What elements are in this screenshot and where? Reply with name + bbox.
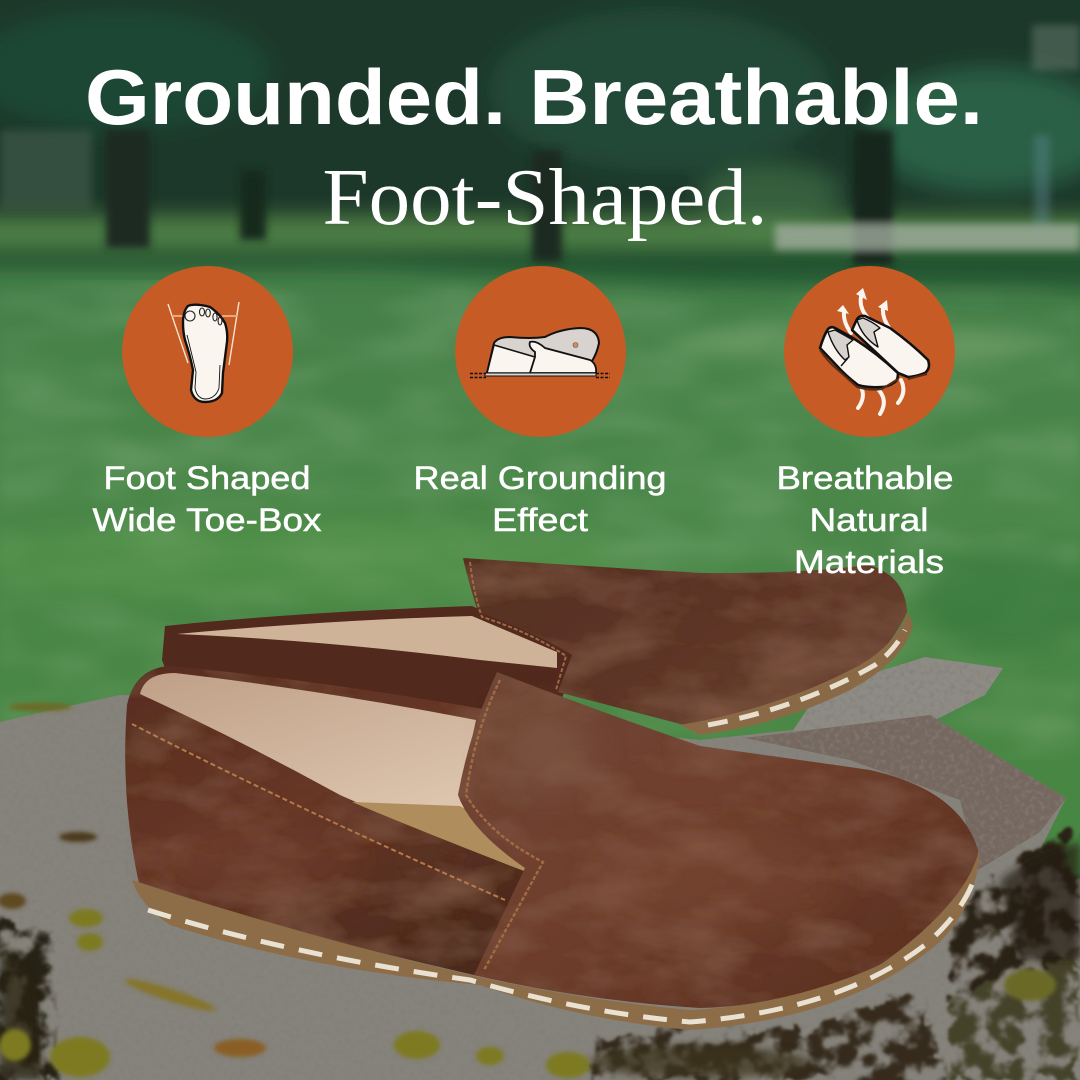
- front shoe stitching: [132, 724, 505, 900]
- label: real grounding effect: [414, 460, 666, 538]
- air arrows: [844, 297, 903, 414]
- label: breathable natural materials: Natural: [810, 502, 928, 538]
- front shoe vamp: [458, 672, 978, 1008]
- back shoe stitching: [470, 562, 566, 690]
- back slip-on: [852, 316, 929, 377]
- icon: breathable shoes: [784, 266, 955, 437]
- front shoe lining: [140, 673, 527, 872]
- title: Grounded. Breathable.: [85, 53, 983, 141]
- label: breathable natural materials: Materials: [794, 544, 944, 580]
- label: breathable natural materials: Breathable: [776, 460, 954, 496]
- front slip-on: [820, 327, 898, 387]
- back shoe quarter: [162, 606, 578, 712]
- front shoe sole: [132, 850, 980, 1030]
- moss patches: [0, 830, 1080, 1080]
- small stone: [790, 657, 1003, 737]
- label: real grounding effect: Real Grounding: [414, 460, 666, 496]
- back shoe: [162, 558, 913, 735]
- label: foot shaped wide toe-box: [92, 460, 322, 538]
- front shoe leather highlights: [160, 710, 840, 930]
- label: real grounding effect: Effect: [492, 502, 588, 538]
- icon: foot shaped toe box: [122, 266, 293, 437]
- label: breathable natural materials: [776, 460, 954, 580]
- back shoe sole: [680, 612, 913, 735]
- front shoe: [125, 666, 980, 1030]
- title: Foot-Shaped.: [322, 154, 768, 242]
- label: foot shaped wide toe-box: Wide Toe-Box: [92, 502, 322, 538]
- back shoe lining: [177, 616, 557, 668]
- icon: real grounding shoe: [455, 266, 626, 437]
- back shoe vamp: [463, 558, 907, 726]
- front shoe quarter: [125, 666, 530, 976]
- front shoe vamp stitching: [466, 680, 543, 970]
- label: foot shaped wide toe-box: Foot Shaped: [104, 460, 310, 496]
- brown slab: [745, 715, 1066, 870]
- title: [85, 53, 983, 242]
- rock base: [0, 657, 1080, 1080]
